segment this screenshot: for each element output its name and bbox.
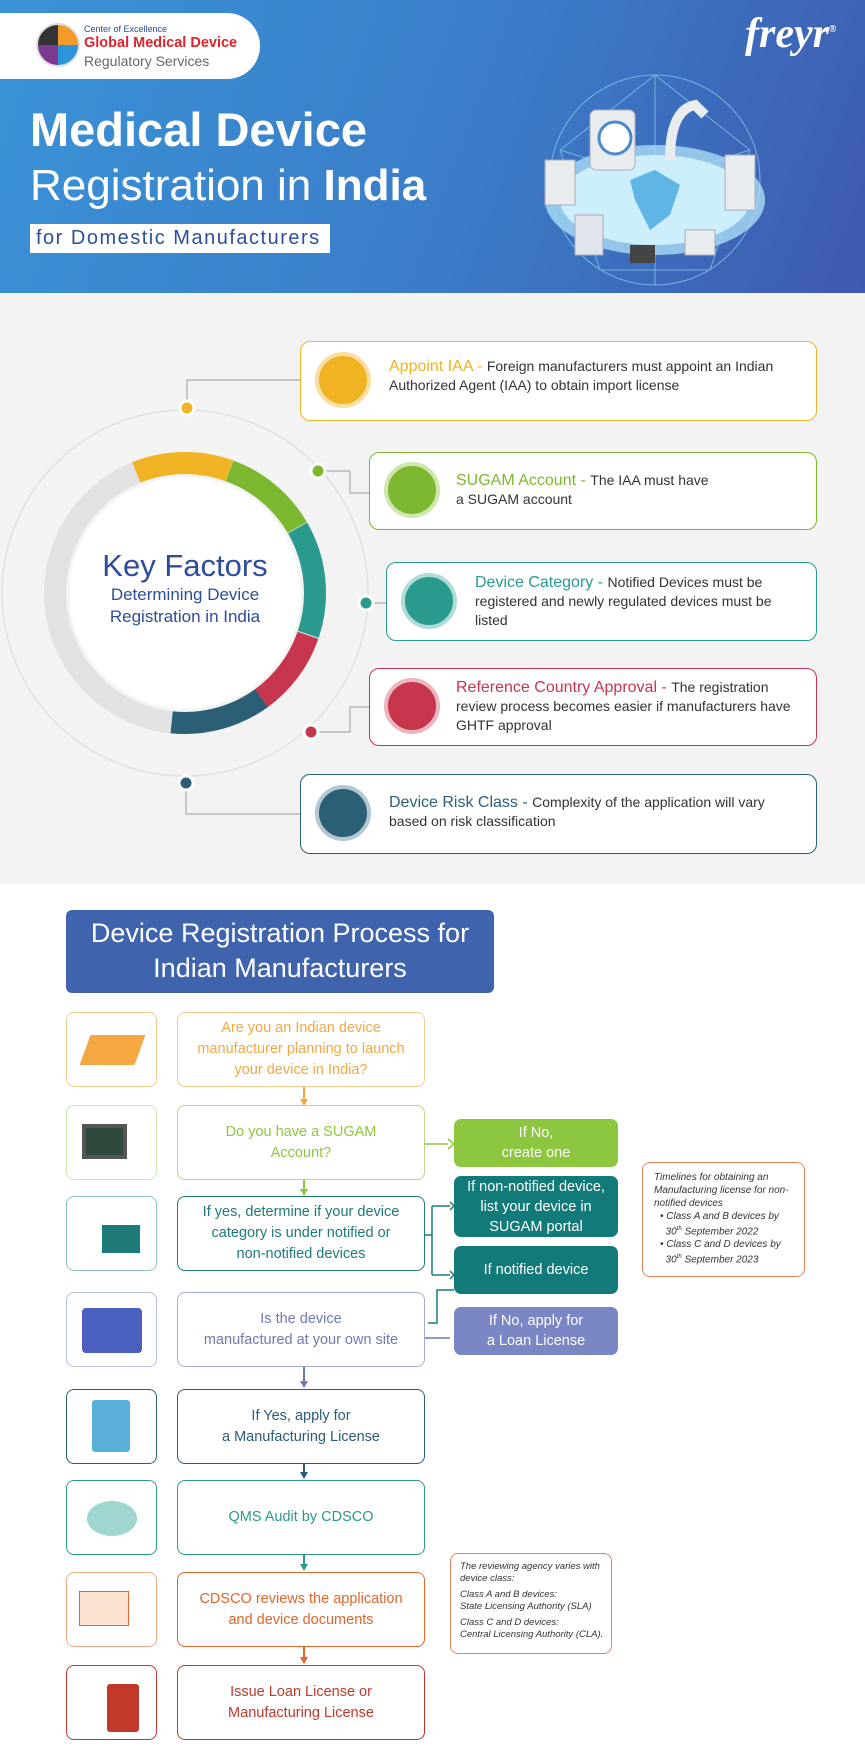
illustration: device globe bbox=[544, 74, 765, 286]
box: loan license: a Loan License bbox=[487, 1333, 585, 1349]
subtitle: for Domestic Manufacturers bbox=[36, 227, 321, 249]
text: Manufacturing License bbox=[228, 1704, 374, 1720]
card: device risk class bbox=[300, 774, 817, 854]
icon: envelope bbox=[66, 1196, 157, 1271]
icon: robot arm bbox=[66, 1292, 157, 1367]
icon: clipboard bbox=[66, 1389, 157, 1464]
icon: flask bbox=[384, 462, 440, 518]
callout: timelines: Timelines for obtaining an Manufacturing license for non-notified devices bbox=[654, 1172, 789, 1209]
text: Account? bbox=[271, 1144, 331, 1160]
box: notified bbox=[454, 1246, 618, 1294]
icon: laptop bbox=[66, 1105, 157, 1180]
callout: reviewing agency: Class A and B devices: bbox=[460, 1589, 557, 1600]
card: SUGAM account: SUGAM Account - The IAA must have bbox=[456, 472, 709, 489]
text: manufacturer planning to launch bbox=[197, 1041, 405, 1057]
chart: key factors ring bbox=[1, 379, 386, 815]
text: Are you an Indian device bbox=[221, 1020, 381, 1036]
callout: reviewing agency: State Licensing Authority (SLA) bbox=[460, 1600, 592, 1612]
card: appoint IAA: Appoint IAA - Foreign manufacturers must appoint an Indian Authorized Agent (IAA) to obtain import license bbox=[389, 358, 773, 393]
logo: freyr: freyr® bbox=[745, 11, 836, 57]
callout: timelines: • Class A and B devices by bbox=[660, 1211, 779, 1222]
text: your device in India? bbox=[234, 1062, 367, 1078]
callout: timelines bbox=[642, 1162, 805, 1277]
text: non-notified devices bbox=[236, 1246, 365, 1262]
box: loan license: If No, apply for bbox=[489, 1313, 583, 1329]
card: appoint IAA bbox=[300, 341, 817, 421]
step 4 bbox=[66, 1292, 425, 1367]
box: non-notified: list your device in bbox=[480, 1198, 592, 1214]
panel: key factors bbox=[0, 293, 865, 884]
heading: device registration process bbox=[66, 910, 494, 993]
step 2 bbox=[66, 1105, 425, 1180]
callout: timelines: • Class C and D devices by bbox=[660, 1239, 781, 1250]
badge: center of excellence: Global Medical Device bbox=[84, 35, 237, 51]
text: Do you have a SUGAM bbox=[226, 1124, 376, 1140]
text: Is the device bbox=[260, 1310, 342, 1326]
card: SUGAM account bbox=[369, 452, 817, 530]
text: Issue Loan License or bbox=[230, 1684, 372, 1700]
icon: badge circle bbox=[36, 23, 80, 67]
box: non-notified bbox=[454, 1176, 618, 1237]
card: device category bbox=[386, 562, 817, 641]
icon: network bbox=[384, 678, 440, 734]
callout: reviewing agency: The reviewing agency varies with device class: bbox=[460, 1561, 600, 1584]
callout: reviewing agency bbox=[450, 1553, 612, 1654]
card: SUGAM account: a SUGAM account bbox=[456, 491, 572, 507]
text: manufactured at your own site bbox=[204, 1332, 398, 1348]
callout: reviewing agency: Class C and D devices: bbox=[460, 1617, 559, 1628]
step 5 bbox=[66, 1389, 425, 1464]
step 3 bbox=[66, 1196, 425, 1271]
text: category is under notified or bbox=[212, 1225, 390, 1241]
box: notified: If notified device bbox=[484, 1262, 588, 1278]
callout: timelines: 30th September 2022 bbox=[666, 1226, 758, 1237]
text: and device documents bbox=[228, 1612, 374, 1628]
heading: key factors: Key Factors bbox=[102, 548, 268, 583]
callout: timelines: 30th September 2023 bbox=[666, 1254, 758, 1266]
text: CDSCO reviews the application bbox=[199, 1590, 403, 1606]
text: QMS Audit by CDSCO bbox=[228, 1509, 374, 1525]
icon: risk class bbox=[315, 785, 371, 841]
icon: IAA bbox=[315, 352, 371, 408]
badge: center of excellence: Regulatory Services bbox=[84, 53, 209, 69]
icon: rocket launch bbox=[66, 1012, 157, 1087]
box: non-notified: SUGAM portal bbox=[489, 1218, 583, 1234]
card: device risk class: Device Risk Class - Complexity of the application will vary based on risk classification bbox=[389, 794, 765, 829]
icon: review bbox=[66, 1572, 157, 1647]
step 6 bbox=[66, 1480, 425, 1555]
text: a Manufacturing License bbox=[222, 1428, 380, 1444]
title bbox=[30, 103, 426, 210]
box: if no create one: If No, bbox=[519, 1125, 553, 1141]
badge: center of excellence: Center of Excellence bbox=[84, 24, 167, 34]
card: reference country approval bbox=[369, 668, 817, 746]
step 7 bbox=[66, 1572, 425, 1647]
icon: audit bbox=[66, 1480, 157, 1555]
box: non-notified: If non-notified device, bbox=[467, 1178, 605, 1194]
box: if no create one: create one bbox=[502, 1145, 570, 1161]
title: Registration in India bbox=[30, 161, 426, 210]
icon: device bbox=[401, 573, 457, 629]
header banner bbox=[0, 0, 865, 293]
box: if no create one bbox=[454, 1119, 618, 1167]
title: Medical Device bbox=[30, 103, 367, 156]
callout: reviewing agency: Central Licensing Authority (CLA). bbox=[460, 1628, 603, 1640]
badge: center of excellence bbox=[0, 13, 260, 79]
card: reference country approval: Reference Country Approval - The registration review process becomes easier if manufacturers have GHTF approval bbox=[456, 679, 791, 733]
heading: key factors bbox=[102, 548, 268, 626]
icon: license bbox=[66, 1665, 157, 1740]
heading: device registration process: Indian Manufacturers bbox=[153, 953, 407, 983]
step 1 bbox=[66, 1012, 425, 1087]
heading: device registration process: Device Registration Process for bbox=[91, 918, 469, 948]
box: loan license bbox=[454, 1307, 618, 1355]
text: If Yes, apply for bbox=[251, 1408, 351, 1424]
heading: key factors: Determining Device Registration in India bbox=[110, 585, 260, 626]
card: device category: Device Category - Notified Devices must be registered and newly regulated devices must be listed bbox=[475, 574, 772, 628]
step 8 bbox=[66, 1665, 425, 1740]
text: If yes, determine if your device bbox=[203, 1204, 399, 1220]
